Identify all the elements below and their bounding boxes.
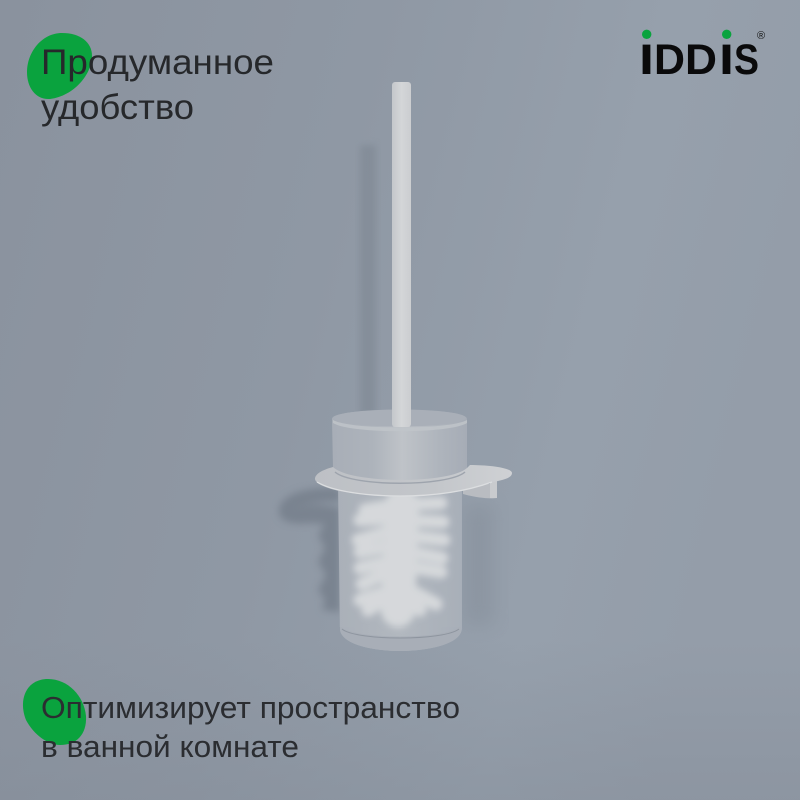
product: toilet brush holder xyxy=(315,82,512,651)
glass cup upper part xyxy=(332,410,467,482)
brush bristles xyxy=(358,503,444,616)
headline text: удобство xyxy=(41,88,194,127)
logo wordmark: D xyxy=(685,36,717,84)
glass cup front rim over handle xyxy=(333,420,467,431)
logo wordmark: I xyxy=(719,36,734,84)
logo wordmark: D xyxy=(654,36,685,84)
caption block xyxy=(23,679,460,764)
caption text: в ванной комнате xyxy=(41,729,299,764)
wall bracket xyxy=(315,465,512,498)
headline block xyxy=(27,33,274,127)
headline text: Продуманное xyxy=(41,43,274,82)
green blob: caption xyxy=(23,679,86,745)
logo: IDDIS xyxy=(639,30,765,84)
logo wordmark: I xyxy=(639,36,654,84)
headline text xyxy=(41,43,274,127)
glass haze over bristles xyxy=(339,485,461,627)
logo green dots xyxy=(642,30,731,39)
brush handle xyxy=(392,82,411,427)
soft wall shadows of the holder xyxy=(279,145,494,625)
logo wordmark: S xyxy=(734,36,759,84)
caption text: Оптимизирует пространство xyxy=(41,690,460,725)
registered mark: ® xyxy=(757,30,765,42)
green blob: headline xyxy=(27,33,92,99)
logo wordmark xyxy=(639,36,759,84)
caption text xyxy=(41,690,460,764)
glass cup lower body xyxy=(338,485,462,651)
